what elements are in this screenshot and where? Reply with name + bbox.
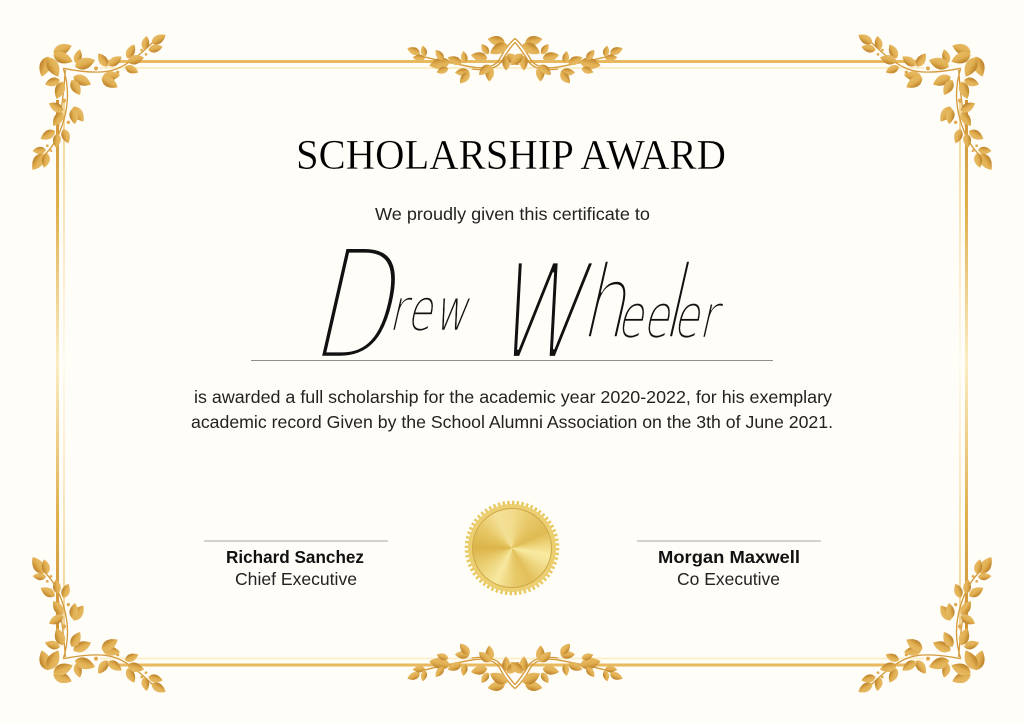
citation text: academic record Given by the School Alumni Association on the 3th of June 2021. <box>191 412 833 432</box>
signatory: Richard Sanchez: Chief Executive <box>235 569 357 589</box>
gold seal <box>464 500 560 596</box>
signatory: Morgan Maxwell: Co Executive <box>677 569 780 589</box>
citation text: is awarded a full scholarship for the academic year 2020-2022, for his exemplary <box>194 387 832 407</box>
name rule <box>251 360 773 361</box>
frame: double gold border <box>56 60 968 666</box>
signatory: Morgan Maxwell: Morgan Maxwell <box>658 547 800 567</box>
ornament: bottom-right laurel corner <box>856 554 996 696</box>
signatory: Morgan Maxwell <box>637 540 821 589</box>
recipient name signature: rew <box>385 278 496 345</box>
recipient name signature <box>300 219 743 393</box>
recipient name signature: D <box>300 219 420 393</box>
citation text <box>191 387 833 432</box>
intro line: We proudly given this certificate to <box>375 204 650 224</box>
recipient name signature: er <box>669 282 728 352</box>
signatory: Richard Sanchez <box>204 540 388 589</box>
recipient name signature: ee <box>613 282 681 352</box>
recipient name signature: l <box>656 245 702 361</box>
recipient name signature: W <box>483 236 608 388</box>
recipient name signature: h <box>575 245 645 361</box>
ornament: top centre laurel <box>406 34 624 86</box>
signatory: Richard Sanchez: Richard Sanchez <box>226 547 364 567</box>
title: SCHOLARSHIP AWARD <box>296 133 726 179</box>
ornament: top-left laurel corner <box>28 31 168 173</box>
ornament: bottom-left laurel corner <box>28 554 168 696</box>
ornament: bottom centre laurel <box>406 641 624 693</box>
ornament: top-right laurel corner <box>856 31 996 173</box>
